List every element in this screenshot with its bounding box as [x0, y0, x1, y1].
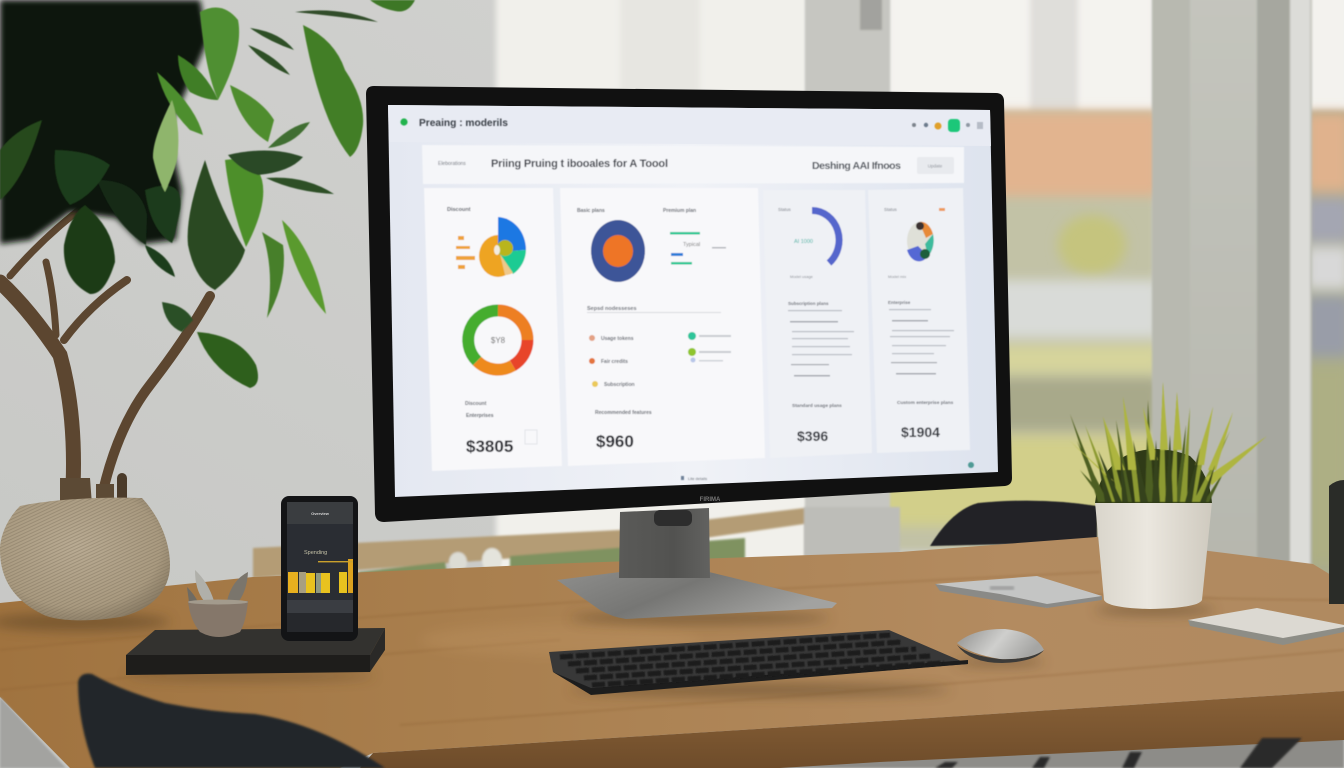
brand mark: FIRIMA: [700, 497, 721, 503]
plan two heading: Basic plans: [577, 208, 605, 214]
woven pot: [0, 498, 170, 620]
app title: Preaing : moderils: [419, 118, 508, 129]
feature list: Usage tokens: [601, 336, 634, 342]
toolbar icons: [912, 119, 983, 132]
small plan icon: [525, 430, 537, 444]
page subtitle: Deshing AAI Ifnoos: [812, 160, 901, 172]
floor under desk: [560, 725, 1344, 768]
desk top: [0, 537, 1344, 768]
stand neck: [619, 508, 710, 578]
background: window bench: [253, 507, 900, 590]
plan three heading: Status: [778, 207, 792, 212]
plan three label: Standard usage plans: [792, 403, 842, 409]
under-desk chair legs: [935, 738, 1302, 768]
panel: plan four: Model mix: [888, 274, 906, 279]
multicolour ring chart: [907, 222, 934, 261]
footer status icon: [968, 462, 974, 468]
white planter: [1095, 502, 1212, 609]
grass base: [1095, 449, 1212, 503]
potted plant on left: [0, 0, 415, 620]
plan two label: Recommended features: [595, 410, 652, 416]
status dot: [400, 118, 408, 126]
panel: plan three: Model usage: [790, 274, 814, 279]
bar legend: [670, 232, 726, 264]
section heading: Sepsd nodesseses: [587, 306, 637, 312]
bezel: [366, 86, 1012, 522]
breadcrumb: Eleborations: [438, 161, 466, 167]
dark object at right edge: [1329, 480, 1344, 604]
plan four heading: Status: [884, 207, 898, 212]
grey shape at lower left: [0, 697, 66, 768]
black office chair behind desk: [930, 501, 1097, 546]
donut chart: [468, 310, 528, 370]
smartphone: [281, 496, 358, 641]
desktop grass plant: [1070, 382, 1267, 609]
header button: Update: [928, 164, 943, 168]
object shadows: [0, 605, 1215, 696]
wooden desk: [0, 537, 1344, 768]
panel: plan one: [424, 188, 562, 471]
dark foliage mass: [0, 0, 208, 244]
bar legend: Typical: [683, 242, 700, 248]
screen contents: [400, 118, 983, 481]
grass blades: [1070, 382, 1267, 502]
plan one caption: Discount: [465, 401, 487, 407]
plan four text lines: [888, 300, 954, 374]
phone bar chart: [288, 559, 353, 593]
donut centre value: $Y8: [491, 336, 506, 345]
monitor: [366, 86, 1012, 522]
notebook on desk: [935, 576, 1102, 608]
plan three text lines: Subscription plans: [788, 301, 829, 306]
second notebook on desk: [1188, 608, 1344, 645]
header panel: [422, 145, 964, 184]
desk highlight: [420, 624, 700, 656]
phone chart title: Spending: [304, 550, 327, 556]
feature list: [589, 335, 635, 388]
panel: plan three: [763, 190, 872, 458]
page title: Priing Pruing t ibooales for A Toool: [491, 158, 668, 170]
plan one price: $3805: [466, 437, 513, 456]
gauge label: AI 1000: [794, 239, 813, 245]
plant stems: [0, 200, 210, 505]
plan one label: Enterprises: [466, 413, 494, 419]
screen: [388, 105, 998, 497]
phone dock with bowl and phone: [126, 496, 385, 675]
panel: plan four: [868, 188, 970, 453]
header button: [917, 157, 954, 174]
plan two price: $960: [596, 432, 634, 451]
feature list: Fair credits: [601, 359, 628, 365]
foreground chair: [78, 674, 385, 768]
stand base: [557, 572, 837, 619]
plan two second heading: Premium plan: [663, 208, 696, 214]
wood grain: [0, 572, 1344, 725]
radial gauge: [812, 210, 839, 263]
monitor stand: [557, 508, 837, 619]
desk front edge: [360, 691, 1344, 768]
leaf canopy: [0, 0, 415, 388]
status badges: [688, 332, 731, 362]
pot stems: [60, 478, 114, 505]
plan three text lines: [788, 301, 854, 376]
feature list: Subscription: [604, 382, 635, 388]
keyboard: [549, 630, 968, 695]
plan four price: $1904: [901, 424, 940, 440]
mouse: [957, 629, 1044, 663]
plan three price: $396: [797, 428, 828, 444]
metal bowl with pods: [187, 570, 248, 637]
panel: plan two: [560, 188, 765, 466]
pie legend bars: [456, 236, 475, 269]
footer note: Lite details: [688, 476, 707, 481]
plan four text lines: Enterprise: [888, 300, 911, 305]
dock: [126, 628, 385, 675]
plan four label: Custom enterprise plans: [897, 400, 954, 406]
plan one heading: Discount: [447, 207, 471, 213]
pie chart: [479, 217, 526, 277]
phone header text: Overview: [311, 511, 330, 516]
target chart: [591, 220, 645, 282]
